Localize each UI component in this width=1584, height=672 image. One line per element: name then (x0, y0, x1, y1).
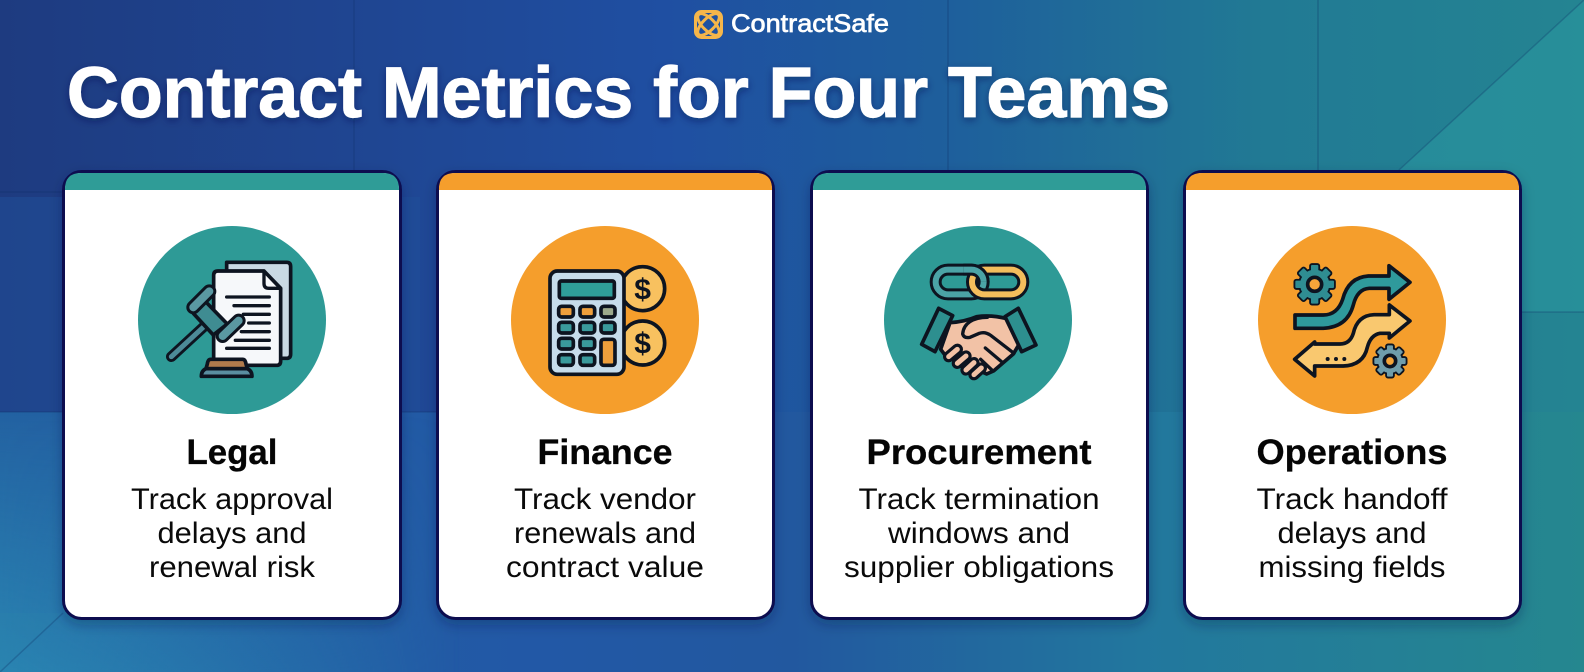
panel: Procurement (812, 172, 1148, 618)
panel: Operations (1184, 172, 1520, 618)
icon: chain link and handshake (884, 226, 1072, 414)
text block: Finance description: renewals and (514, 517, 696, 550)
text block: Finance description (506, 483, 704, 584)
text block: Procurement description (844, 483, 1114, 584)
icon: gavel and documents (138, 226, 326, 414)
text block: Finance description: Track vendor (514, 483, 696, 516)
title: Contract Metrics for Four Teams (67, 54, 1170, 133)
panel header band (1186, 173, 1519, 190)
text block: Legal description (131, 483, 333, 584)
text block: Procurement description: Track termination (858, 483, 1100, 516)
logo: ContractSafe (694, 10, 889, 39)
panel: Legal (64, 172, 400, 618)
text block: Legal description: Track approval (131, 483, 333, 516)
text block: Operations description: delays and (1278, 517, 1426, 550)
icon: calculator and coins: $ (634, 328, 651, 361)
text block: Operations description (1256, 483, 1448, 584)
heading: Procurement: Procurement (866, 433, 1092, 472)
panel header band (65, 173, 399, 190)
text block: Procurement description: supplier obligations (844, 551, 1114, 584)
text block: Operations description: Track handoff (1256, 483, 1448, 516)
text block: Legal description: renewal risk (149, 551, 316, 584)
icon: workflow arrows and gears (1258, 226, 1446, 414)
icon: calculator and coins: $ (634, 273, 651, 306)
text block: Finance description: contract value (506, 551, 704, 584)
panel header band (439, 173, 772, 190)
panel: Finance (438, 172, 774, 618)
heading: Finance: Finance (538, 433, 672, 472)
heading: Legal: Legal (186, 433, 278, 472)
icon: logo mark (694, 10, 723, 39)
panel header band (813, 173, 1146, 190)
text block: Operations description: missing fields (1258, 551, 1446, 584)
icon: calculator and coins (511, 226, 699, 414)
heading: Operations: Operations (1256, 433, 1448, 472)
text block: Legal description: delays and (158, 517, 306, 550)
text block: Procurement description: windows and (887, 517, 1070, 550)
logo wordmark: ContractSafe (731, 10, 889, 38)
